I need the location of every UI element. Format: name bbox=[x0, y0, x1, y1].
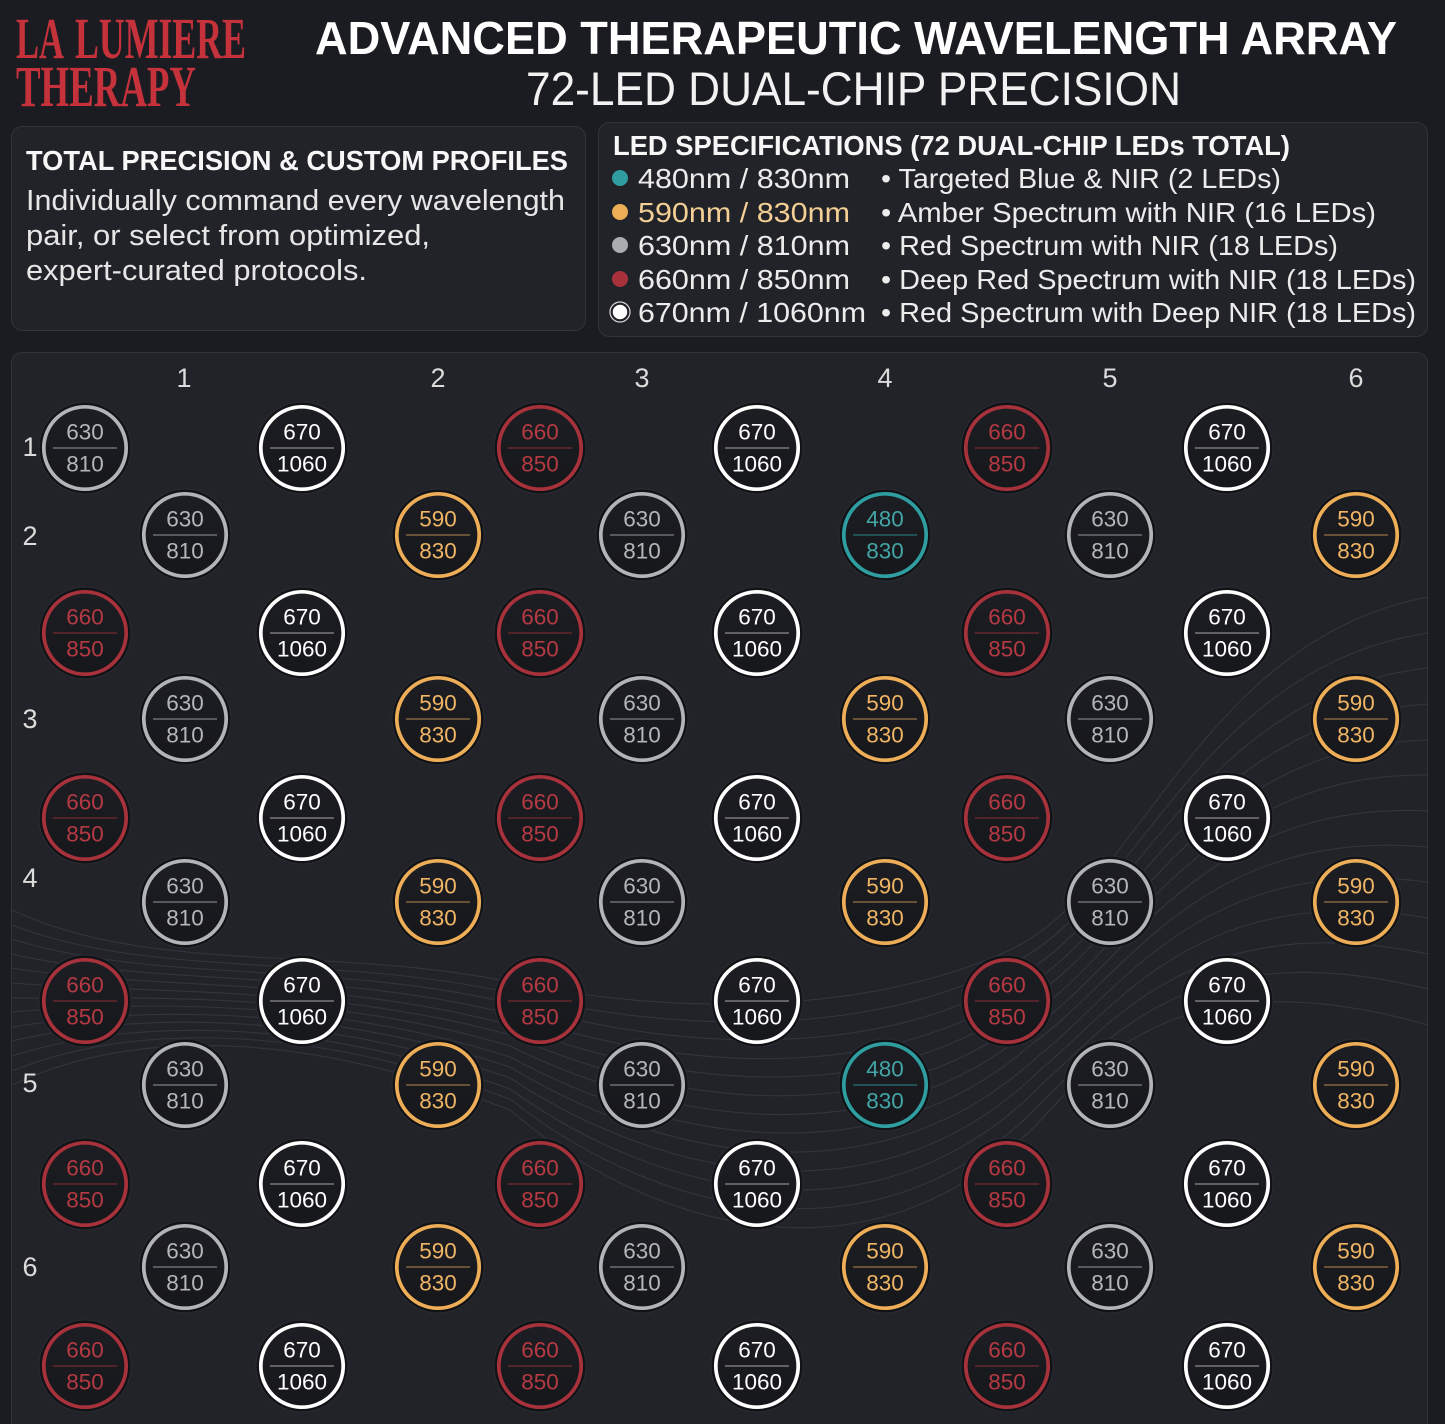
LED 670/1060: 1060 bbox=[732, 636, 782, 662]
panel: LED array grid bbox=[12, 352, 1428, 1424]
LED 670/1060 bbox=[256, 955, 348, 1047]
LED 630/810: 810 bbox=[1091, 906, 1129, 930]
LED 630/810 bbox=[39, 402, 131, 494]
LED 660/850 bbox=[961, 1138, 1053, 1230]
LED array bbox=[39, 402, 1402, 1412]
LED 660/850: 660 bbox=[521, 420, 559, 444]
LED 590/830: 830 bbox=[1337, 1270, 1375, 1296]
column axis labels: 2 bbox=[430, 363, 446, 393]
LED 630/810: 630 bbox=[166, 1238, 204, 1264]
LED 630/810: 810 bbox=[1091, 538, 1129, 564]
LED 670/1060: 1060 bbox=[1202, 1370, 1252, 1394]
LED 670/1060: 670 bbox=[283, 1156, 321, 1180]
LED 630/810 bbox=[596, 1039, 688, 1131]
LED 590/830: 830 bbox=[1337, 906, 1375, 930]
LED 630/810: 630 bbox=[623, 690, 661, 716]
LED 660/850 bbox=[494, 587, 586, 679]
title: ADVANCED THERAPEUTIC WAVELENGTH ARRAY bbox=[315, 12, 1397, 64]
LED 670/1060: 670 bbox=[738, 790, 776, 814]
LED 670/1060 bbox=[1181, 1138, 1273, 1230]
LED 630/810: 630 bbox=[66, 420, 104, 444]
LED 630/810: 810 bbox=[166, 722, 204, 748]
LED 630/810 bbox=[1064, 489, 1156, 581]
LED 660/850 bbox=[494, 955, 586, 1047]
row axis labels: 3 bbox=[22, 704, 38, 734]
LED 660/850: 850 bbox=[521, 822, 559, 846]
LED 660/850: 660 bbox=[66, 972, 104, 998]
LED 630/810: 630 bbox=[623, 874, 661, 898]
LED 670/1060 bbox=[711, 587, 803, 679]
LED 670/1060: 670 bbox=[1208, 604, 1246, 630]
LED 670/1060: 670 bbox=[283, 420, 321, 444]
LED 630/810: 810 bbox=[623, 906, 661, 930]
LED 590/830: 830 bbox=[419, 538, 457, 564]
LED 670/1060: 670 bbox=[1208, 972, 1246, 998]
LED 660/850: 660 bbox=[521, 1338, 559, 1362]
LED 630/810 bbox=[596, 856, 688, 948]
LED 630/810 bbox=[1064, 1221, 1156, 1313]
title bbox=[315, 12, 1397, 115]
LED 630/810 bbox=[1064, 856, 1156, 948]
LED 660/850: 850 bbox=[66, 636, 104, 662]
LED 590/830: 590 bbox=[866, 1238, 904, 1264]
LED 660/850: 850 bbox=[66, 1370, 104, 1394]
LED 670/1060 bbox=[1181, 402, 1273, 494]
LED 660/850: 850 bbox=[988, 1004, 1026, 1030]
LED 670/1060: 670 bbox=[283, 972, 321, 998]
LED 590/830: 830 bbox=[419, 722, 457, 748]
LED 590/830 bbox=[839, 1221, 931, 1313]
LED 590/830 bbox=[392, 673, 484, 765]
LED 660/850 bbox=[39, 1138, 131, 1230]
panel: total precision and custom profiles: TOTAL PRECISION & CUSTOM PROFILES bbox=[26, 145, 568, 176]
LED 590/830 bbox=[1310, 673, 1402, 765]
LED 480/830: 830 bbox=[866, 1088, 904, 1114]
LED 670/1060: 670 bbox=[1208, 1156, 1246, 1180]
panel: LED specifications legend: 480nm / 830nm bbox=[638, 163, 850, 194]
LED 630/810 bbox=[139, 1221, 231, 1313]
column axis labels: 5 bbox=[1102, 363, 1118, 393]
panel: LED specifications legend: 630nm / 810nm bbox=[638, 230, 850, 261]
LED 630/810: 810 bbox=[166, 538, 204, 564]
LED 630/810 bbox=[1064, 673, 1156, 765]
LED 670/1060: 1060 bbox=[277, 1004, 327, 1030]
LED 590/830 bbox=[839, 856, 931, 948]
LED 630/810: 630 bbox=[1091, 506, 1129, 532]
LED 660/850: 660 bbox=[521, 1156, 559, 1180]
panel: LED specifications legend: 590nm / 830nm bbox=[638, 197, 850, 228]
LED 590/830: 830 bbox=[866, 722, 904, 748]
LED 480/830 bbox=[839, 1039, 931, 1131]
LED 660/850 bbox=[39, 955, 131, 1047]
LED 660/850 bbox=[39, 1320, 131, 1412]
LED 630/810: 630 bbox=[166, 690, 204, 716]
LED 590/830: 590 bbox=[419, 1056, 457, 1082]
LED 660/850: 850 bbox=[988, 1188, 1026, 1212]
LED 630/810: 630 bbox=[1091, 1056, 1129, 1082]
LED 660/850: 850 bbox=[66, 822, 104, 846]
LED 590/830: 830 bbox=[866, 906, 904, 930]
LED 630/810: 630 bbox=[623, 1238, 661, 1264]
LED 630/810: 810 bbox=[1091, 1088, 1129, 1114]
LED 670/1060 bbox=[711, 1320, 803, 1412]
LED 670/1060 bbox=[256, 1320, 348, 1412]
LED 670/1060: 1060 bbox=[732, 452, 782, 476]
LED 660/850: 850 bbox=[521, 636, 559, 662]
LED 590/830 bbox=[392, 489, 484, 581]
LED 590/830: 830 bbox=[419, 906, 457, 930]
panel: total precision and custom profiles: expert-curated protocols. bbox=[26, 255, 367, 287]
LED 630/810: 630 bbox=[1091, 1238, 1129, 1264]
LED 630/810 bbox=[139, 673, 231, 765]
LED 590/830 bbox=[392, 1221, 484, 1313]
LED 590/830: 590 bbox=[1337, 1238, 1375, 1264]
LED 660/850: 660 bbox=[988, 1156, 1026, 1180]
LED 630/810: 810 bbox=[623, 538, 661, 564]
column axis labels: 3 bbox=[634, 363, 650, 393]
LED 590/830: 590 bbox=[419, 874, 457, 898]
LED 660/850 bbox=[961, 955, 1053, 1047]
LED 660/850: 660 bbox=[988, 790, 1026, 814]
LED 660/850 bbox=[494, 1138, 586, 1230]
panel: LED specifications legend: 660nm / 850nm bbox=[638, 264, 850, 295]
LED 660/850: 850 bbox=[521, 1370, 559, 1394]
LED 670/1060: 1060 bbox=[277, 822, 327, 846]
LED 670/1060: 670 bbox=[1208, 790, 1246, 814]
row axis labels bbox=[22, 432, 38, 1282]
LED 670/1060 bbox=[711, 1138, 803, 1230]
LED 630/810: 630 bbox=[1091, 690, 1129, 716]
LED 590/830: 590 bbox=[1337, 1056, 1375, 1082]
LED 660/850 bbox=[961, 587, 1053, 679]
LED 660/850: 660 bbox=[66, 604, 104, 630]
LED 660/850: 850 bbox=[988, 1370, 1026, 1394]
LED 670/1060: 1060 bbox=[1202, 1004, 1252, 1030]
panel: LED specifications legend: • Red Spectrum with Deep NIR (18 LEDs) bbox=[881, 297, 1416, 328]
LED 660/850 bbox=[494, 402, 586, 494]
LED 670/1060: 1060 bbox=[1202, 636, 1252, 662]
row axis labels: 6 bbox=[22, 1252, 38, 1282]
LED 630/810 bbox=[596, 489, 688, 581]
LED 480/830 bbox=[839, 489, 931, 581]
LED 590/830: 590 bbox=[1337, 690, 1375, 716]
LED 670/1060: 670 bbox=[738, 1338, 776, 1362]
LED 590/830: 590 bbox=[866, 690, 904, 716]
LED 630/810 bbox=[139, 856, 231, 948]
LED 670/1060: 1060 bbox=[732, 822, 782, 846]
logo: La Lumiere Therapy: LUMIERE bbox=[75, 6, 246, 71]
LED 670/1060 bbox=[1181, 772, 1273, 864]
LED 670/1060 bbox=[711, 955, 803, 1047]
LED 660/850: 850 bbox=[521, 1004, 559, 1030]
panel: total precision and custom profiles: pair, or select from optimized, bbox=[26, 220, 430, 252]
LED 630/810 bbox=[596, 1221, 688, 1313]
LED 660/850: 660 bbox=[988, 420, 1026, 444]
column axis labels bbox=[176, 363, 1364, 393]
column axis labels: 6 bbox=[1348, 363, 1364, 393]
LED 660/850 bbox=[494, 772, 586, 864]
row axis labels: 4 bbox=[22, 863, 38, 893]
LED 670/1060 bbox=[711, 772, 803, 864]
LED 630/810 bbox=[139, 1039, 231, 1131]
LED 660/850: 660 bbox=[521, 604, 559, 630]
LED 660/850: 850 bbox=[988, 452, 1026, 476]
LED 630/810: 810 bbox=[166, 906, 204, 930]
LED 660/850: 660 bbox=[66, 1156, 104, 1180]
LED 660/850 bbox=[39, 587, 131, 679]
LED 630/810: 810 bbox=[166, 1088, 204, 1114]
LED 660/850: 660 bbox=[521, 790, 559, 814]
LED 660/850: 660 bbox=[988, 1338, 1026, 1362]
LED 630/810: 810 bbox=[66, 452, 104, 476]
LED 630/810: 810 bbox=[1091, 1270, 1129, 1296]
LED 660/850: 850 bbox=[521, 1188, 559, 1212]
LED 590/830: 590 bbox=[1337, 506, 1375, 532]
LED 480/830: 480 bbox=[866, 1056, 904, 1082]
logo: La Lumiere Therapy bbox=[16, 6, 246, 119]
LED 630/810: 810 bbox=[1091, 722, 1129, 748]
LED 630/810: 630 bbox=[623, 1056, 661, 1082]
LED 670/1060: 1060 bbox=[732, 1004, 782, 1030]
LED 660/850 bbox=[961, 402, 1053, 494]
LED 590/830: 590 bbox=[1337, 874, 1375, 898]
LED 480/830: 830 bbox=[866, 538, 904, 564]
LED 590/830: 830 bbox=[419, 1270, 457, 1296]
LED 630/810 bbox=[596, 673, 688, 765]
LED 670/1060 bbox=[256, 1138, 348, 1230]
LED 590/830 bbox=[1310, 856, 1402, 948]
LED 670/1060: 670 bbox=[283, 604, 321, 630]
LED 670/1060: 1060 bbox=[277, 1370, 327, 1394]
LED 670/1060 bbox=[256, 402, 348, 494]
LED 670/1060: 1060 bbox=[277, 1188, 327, 1212]
panel: LED specifications legend: 670nm / 1060nm bbox=[638, 297, 866, 328]
LED 660/850: 850 bbox=[66, 1188, 104, 1212]
LED 670/1060 bbox=[256, 772, 348, 864]
row axis labels: 2 bbox=[22, 521, 38, 551]
row axis labels: 1 bbox=[22, 432, 38, 462]
LED 670/1060: 670 bbox=[738, 1156, 776, 1180]
LED 660/850 bbox=[961, 1320, 1053, 1412]
LED 670/1060 bbox=[1181, 955, 1273, 1047]
LED 670/1060: 670 bbox=[1208, 420, 1246, 444]
LED 670/1060: 1060 bbox=[1202, 1188, 1252, 1212]
LED 590/830 bbox=[392, 856, 484, 948]
LED 670/1060: 670 bbox=[1208, 1338, 1246, 1362]
LED 660/850: 660 bbox=[66, 790, 104, 814]
LED 660/850: 850 bbox=[66, 1004, 104, 1030]
LED 590/830: 590 bbox=[419, 1238, 457, 1264]
panel: LED specifications legend: • Amber Spectrum with NIR (16 LEDs) bbox=[881, 197, 1376, 228]
LED 590/830: 830 bbox=[419, 1088, 457, 1114]
LED 590/830 bbox=[839, 673, 931, 765]
LED 630/810: 630 bbox=[166, 874, 204, 898]
LED 660/850: 660 bbox=[521, 972, 559, 998]
LED 630/810: 630 bbox=[623, 506, 661, 532]
logo: La Lumiere Therapy: LA bbox=[16, 6, 64, 71]
column axis labels: 4 bbox=[877, 363, 893, 393]
LED 670/1060 bbox=[1181, 1320, 1273, 1412]
panel: LED specifications legend bbox=[598, 122, 1428, 336]
panel: LED specifications legend: • Targeted Blue & NIR (2 LEDs) bbox=[881, 163, 1281, 194]
LED 660/850 bbox=[494, 1320, 586, 1412]
LED 590/830: 830 bbox=[1337, 538, 1375, 564]
LED 670/1060: 1060 bbox=[1202, 452, 1252, 476]
LED 590/830 bbox=[1310, 489, 1402, 581]
LED 630/810: 630 bbox=[166, 1056, 204, 1082]
LED 670/1060: 670 bbox=[283, 790, 321, 814]
LED 590/830 bbox=[1310, 1221, 1402, 1313]
LED 590/830: 590 bbox=[419, 506, 457, 532]
LED 670/1060: 1060 bbox=[1202, 822, 1252, 846]
panel: LED specifications legend: LED SPECIFICATIONS (72 DUAL-CHIP LEDs TOTAL) bbox=[613, 130, 1290, 161]
LED 660/850 bbox=[39, 772, 131, 864]
LED 590/830: 830 bbox=[1337, 722, 1375, 748]
LED 630/810: 810 bbox=[623, 1088, 661, 1114]
LED 630/810: 810 bbox=[166, 1270, 204, 1296]
LED 630/810: 630 bbox=[166, 506, 204, 532]
LED 670/1060: 1060 bbox=[277, 452, 327, 476]
LED 590/830: 590 bbox=[866, 874, 904, 898]
LED 670/1060: 670 bbox=[738, 604, 776, 630]
LED 670/1060: 670 bbox=[738, 420, 776, 444]
LED 590/830: 590 bbox=[419, 690, 457, 716]
LED 670/1060 bbox=[1181, 587, 1273, 679]
LED 660/850: 660 bbox=[988, 604, 1026, 630]
panel: total precision and custom profiles bbox=[12, 126, 586, 330]
panel: LED specifications legend: • Red Spectrum with NIR (18 LEDs) bbox=[881, 230, 1338, 261]
LED 670/1060: 670 bbox=[738, 972, 776, 998]
LED 660/850 bbox=[961, 772, 1053, 864]
LED 630/810: 810 bbox=[623, 1270, 661, 1296]
LED 670/1060: 1060 bbox=[732, 1370, 782, 1394]
LED 660/850: 660 bbox=[988, 972, 1026, 998]
LED 660/850: 660 bbox=[66, 1338, 104, 1362]
LED 670/1060: 1060 bbox=[732, 1188, 782, 1212]
panel: LED specifications legend: • Deep Red Spectrum with NIR (18 LEDs) bbox=[881, 264, 1416, 295]
LED 480/830: 480 bbox=[866, 506, 904, 532]
LED 660/850: 850 bbox=[988, 636, 1026, 662]
panel: total precision and custom profiles: Individually command every wavelength bbox=[26, 185, 565, 217]
LED 590/830: 830 bbox=[866, 1270, 904, 1296]
LED 630/810 bbox=[1064, 1039, 1156, 1131]
LED 630/810: 630 bbox=[1091, 874, 1129, 898]
LED 630/810 bbox=[139, 489, 231, 581]
logo: La Lumiere Therapy: THERAPY bbox=[16, 54, 196, 119]
column axis labels: 1 bbox=[176, 363, 192, 393]
LED 590/830 bbox=[1310, 1039, 1402, 1131]
LED 590/830: 830 bbox=[1337, 1088, 1375, 1114]
LED 660/850: 850 bbox=[521, 452, 559, 476]
LED 670/1060 bbox=[256, 587, 348, 679]
row axis labels: 5 bbox=[22, 1068, 38, 1098]
LED 670/1060 bbox=[711, 402, 803, 494]
LED 630/810: 810 bbox=[623, 722, 661, 748]
title: 72-LED DUAL-CHIP PRECISION bbox=[526, 62, 1181, 115]
LED 670/1060: 670 bbox=[283, 1338, 321, 1362]
LED 590/830 bbox=[392, 1039, 484, 1131]
LED 670/1060: 1060 bbox=[277, 636, 327, 662]
LED 660/850: 850 bbox=[988, 822, 1026, 846]
